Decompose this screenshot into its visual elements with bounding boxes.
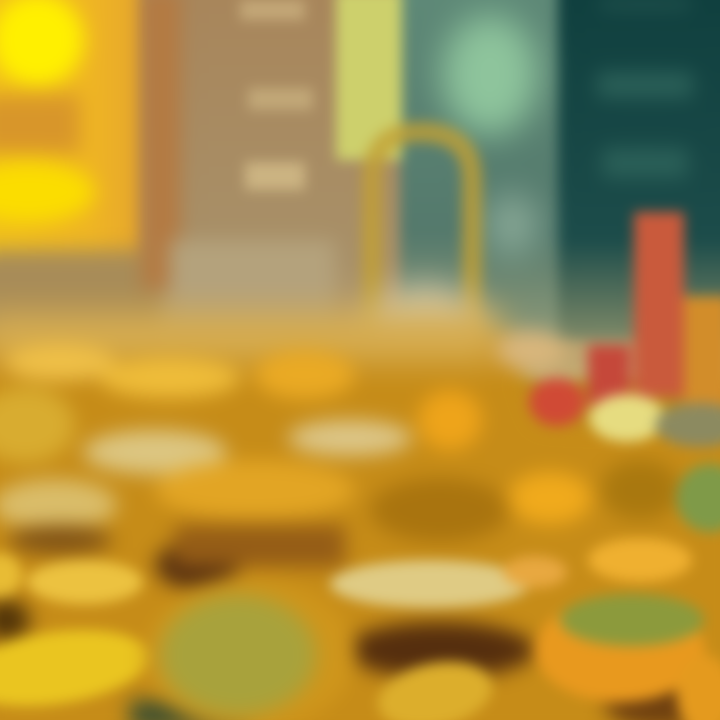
- bar: orange right: [684, 296, 720, 406]
- coins: lower row: [0, 538, 692, 720]
- bar: medium red: [588, 345, 630, 405]
- bar: tallest red: [634, 212, 684, 397]
- building: tan tower with lit windows: [142, 0, 335, 330]
- coins: pale coins in front of bars: [589, 394, 720, 447]
- panel: yellow-green column: [336, 0, 402, 160]
- background: skyline backdrop: [0, 0, 720, 380]
- coin: green coin right edge: [676, 464, 720, 532]
- panel: bright yellow sign on the left: [0, 0, 160, 340]
- bar chart: rising red and orange bars: [495, 212, 720, 426]
- glow: pale green blob: [442, 15, 540, 257]
- coin: large green-gold coin: [145, 579, 355, 720]
- panel: dark teal data board: [597, 0, 693, 178]
- coins: upper row: [0, 344, 680, 542]
- coin: green coin lower right: [535, 594, 705, 702]
- coin: corner gold: [677, 655, 720, 720]
- mist behind the arch: [365, 285, 485, 385]
- glow: warm patch beside bars: [495, 330, 565, 370]
- coin pile: base layer: [0, 312, 720, 720]
- icon: golden arch: [372, 132, 472, 345]
- bar: small red: [529, 378, 585, 426]
- coins: dark shadows between coins: [0, 525, 715, 720]
